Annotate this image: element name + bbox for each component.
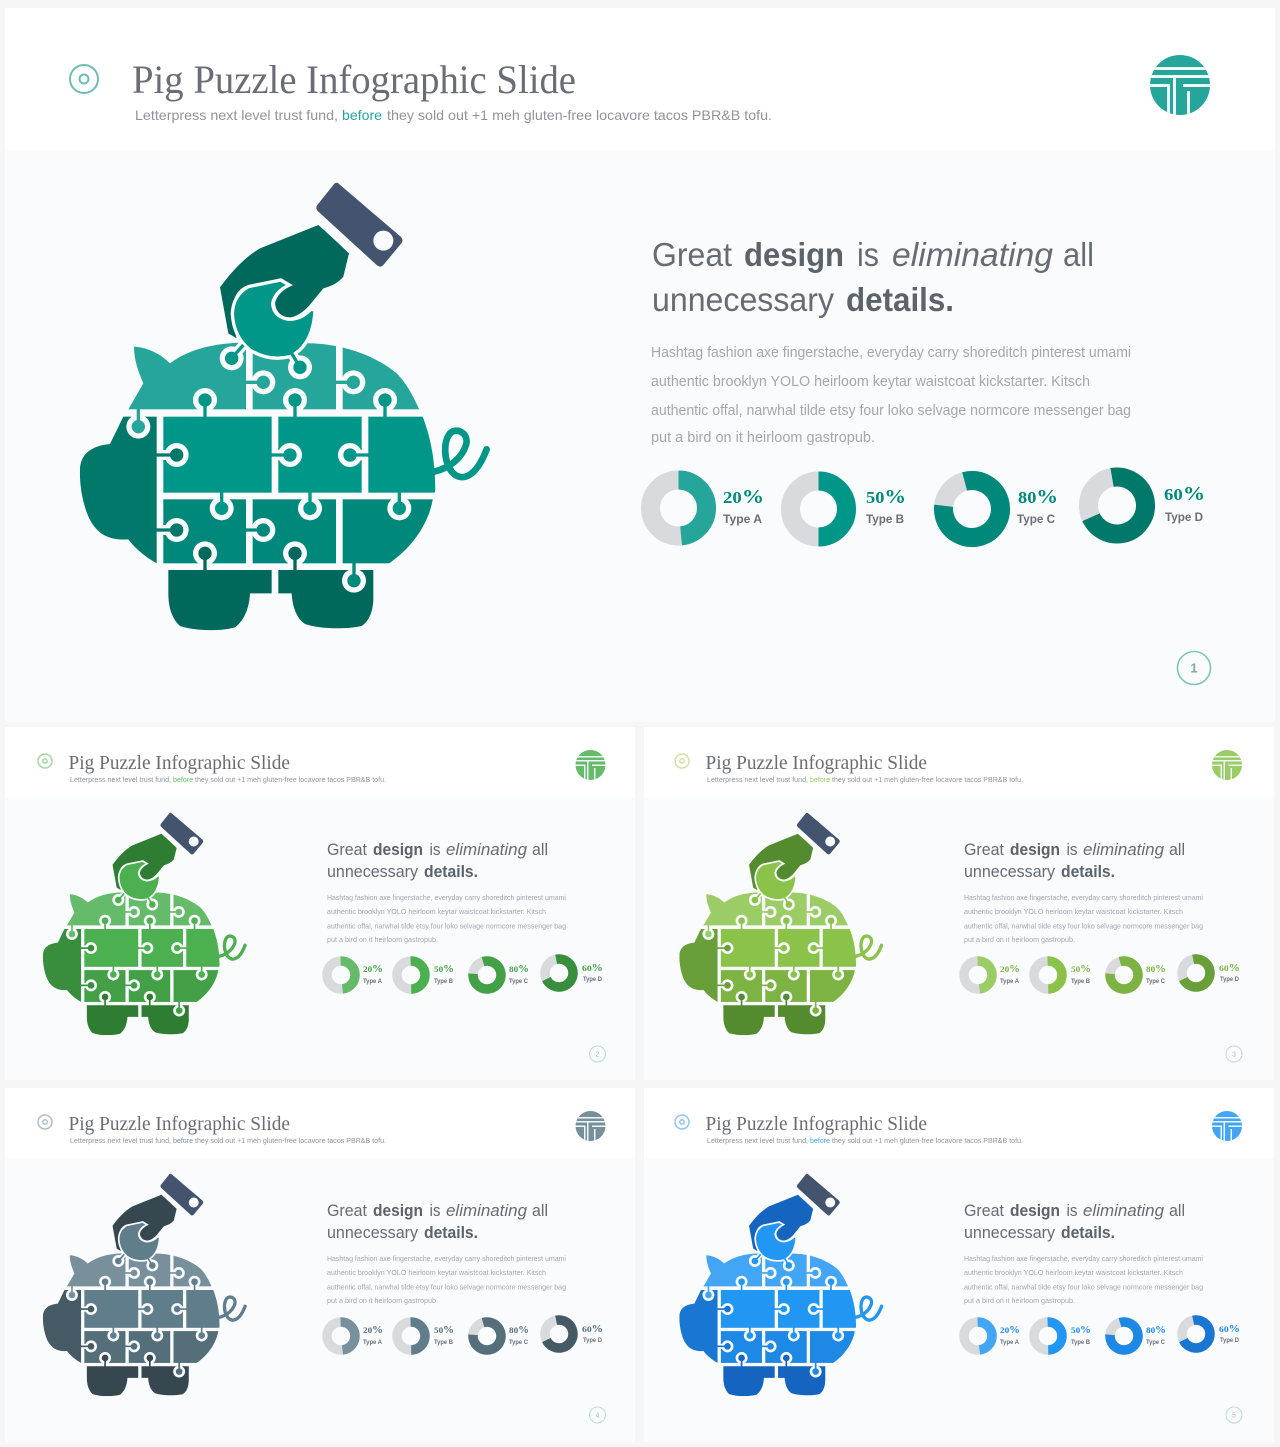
label A xyxy=(1000,964,1020,985)
page number badge xyxy=(590,1046,606,1062)
slide 1: teal xyxy=(5,8,1275,722)
label D: 60% xyxy=(1219,963,1240,974)
headline: design xyxy=(744,236,844,273)
subtitle: before xyxy=(810,777,830,784)
headline: is xyxy=(1066,841,1078,859)
header panel xyxy=(5,8,1275,150)
title: Pig Puzzle Infographic Slide xyxy=(706,1113,927,1135)
body text: authentic offal, narwhal tilde etsy four loko selvage normcore messenger bag xyxy=(651,403,1131,419)
body text: Hashtag fashion axe fingerstache, everyday carry shoreditch pinterest umami xyxy=(964,893,1203,902)
donut A xyxy=(964,1322,992,1350)
body panel xyxy=(5,150,1275,722)
icon: target ring xyxy=(38,1115,52,1129)
headline: is xyxy=(857,236,879,273)
subtitle: Letterpress next level trust fund, xyxy=(70,777,171,784)
label A xyxy=(363,1325,383,1346)
label D: Type D xyxy=(583,977,603,983)
label B: 50% xyxy=(1071,1325,1091,1336)
headline: eliminating xyxy=(446,1202,528,1220)
label C xyxy=(1017,486,1058,526)
headline: eliminating xyxy=(1083,1202,1165,1220)
label C: 80% xyxy=(509,964,529,975)
donut D xyxy=(1180,1318,1212,1350)
page number badge: 3 xyxy=(1232,1052,1236,1058)
donut D xyxy=(1180,957,1212,989)
headline: details. xyxy=(846,281,954,318)
label D xyxy=(1219,1324,1240,1344)
donut A xyxy=(327,961,355,989)
headline: design xyxy=(1010,841,1060,859)
label A xyxy=(363,964,383,985)
page number badge xyxy=(590,1407,606,1423)
headline: details. xyxy=(424,1224,478,1242)
body text: Hashtag fashion axe fingerstache, everyday carry shoreditch pinterest umami xyxy=(327,893,566,902)
label D: Type D xyxy=(583,1338,603,1344)
label C xyxy=(1146,964,1166,985)
subtitle: Letterpress next level trust fund, xyxy=(707,1138,808,1145)
pig puzzle illustration xyxy=(41,813,245,1037)
headline: all xyxy=(1169,1202,1185,1220)
donut A xyxy=(327,1322,355,1350)
donut D xyxy=(543,1318,575,1350)
slide 5: blue xyxy=(644,1088,1274,1442)
page number badge xyxy=(1226,1046,1242,1062)
label D xyxy=(1164,483,1205,524)
subtitle: they sold out +1 meh gluten-free locavore tacos PBR&B tofu. xyxy=(195,777,386,784)
subtitle: before xyxy=(173,1138,193,1145)
donut B xyxy=(1034,1322,1062,1350)
label B: 50% xyxy=(1071,964,1091,975)
page number badge: 5 xyxy=(1232,1412,1236,1420)
donut B xyxy=(1034,961,1062,989)
label B: Type B xyxy=(866,512,904,526)
headline: Great xyxy=(652,236,732,273)
logo xyxy=(574,750,606,781)
icon: target ring xyxy=(38,754,52,768)
headline: all xyxy=(1169,841,1185,859)
label C: Type C xyxy=(1146,1340,1166,1346)
headline: eliminating xyxy=(1083,841,1165,859)
body text: put a bird on it heirloom gastropub. xyxy=(327,1296,438,1305)
headline: is xyxy=(1066,1202,1078,1220)
headline: eliminating xyxy=(446,841,528,859)
page number badge: 4 xyxy=(596,1412,600,1420)
label B xyxy=(1071,964,1091,985)
label C: 80% xyxy=(509,1325,529,1336)
label A: 20% xyxy=(1000,964,1020,975)
donut A xyxy=(650,480,706,536)
slide 4: blue grey xyxy=(5,1088,635,1442)
donut C xyxy=(1107,1319,1141,1353)
subtitle: before xyxy=(173,777,193,784)
body panel xyxy=(644,1158,1274,1442)
title: Pig Puzzle Infographic Slide xyxy=(68,1113,290,1135)
label C xyxy=(1146,1325,1166,1346)
headline: unnecessary xyxy=(964,1224,1056,1242)
body text: Hashtag fashion axe fingerstache, everyday carry shoreditch pinterest umami xyxy=(651,345,1131,361)
pig puzzle illustration xyxy=(678,1174,882,1398)
body text: authentic brooklyn YOLO heirloom keytar waistcoat kickstarter. Kitsch xyxy=(964,907,1183,916)
label D xyxy=(582,963,603,983)
slide 3: light green xyxy=(644,727,1274,1080)
label A: 20% xyxy=(363,1325,383,1336)
donut C xyxy=(1107,958,1141,992)
label A xyxy=(723,486,764,526)
headline: Great xyxy=(964,841,1004,859)
pig puzzle illustration xyxy=(77,183,487,633)
body text: authentic offal, narwhal tilde etsy four loko selvage normcore messenger bag xyxy=(327,922,566,930)
label D: 60% xyxy=(1164,483,1205,505)
label A: Type A xyxy=(1000,979,1020,985)
page number badge: 2 xyxy=(596,1052,600,1058)
headline: unnecessary xyxy=(964,863,1056,881)
label B xyxy=(434,964,454,985)
subtitle: before xyxy=(810,1138,830,1145)
label C: 80% xyxy=(1146,964,1166,975)
donut B xyxy=(397,1322,425,1350)
header panel xyxy=(5,727,635,797)
label D: 60% xyxy=(582,963,603,974)
body text: Hashtag fashion axe fingerstache, everyday carry shoreditch pinterest umami xyxy=(327,1254,566,1263)
logo xyxy=(1211,750,1243,781)
logo xyxy=(1211,1111,1243,1142)
title: Pig Puzzle Infographic Slide xyxy=(132,57,576,102)
body text: authentic brooklyn YOLO heirloom keytar waistcoat kickstarter. Kitsch xyxy=(327,907,546,916)
slide 2: green xyxy=(5,727,635,1080)
label A: Type A xyxy=(723,512,762,526)
donut B xyxy=(397,961,425,989)
label A: 20% xyxy=(723,486,764,508)
body text: put a bird on it heirloom gastropub. xyxy=(964,1296,1075,1305)
headline: design xyxy=(1010,1202,1060,1220)
label D xyxy=(1219,963,1240,983)
label B xyxy=(1071,1325,1091,1346)
label D: Type D xyxy=(1220,977,1240,983)
subtitle: Letterpress next level trust fund, xyxy=(70,1138,171,1145)
label A: 20% xyxy=(1000,1325,1020,1336)
body text: authentic brooklyn YOLO heirloom keytar waistcoat kickstarter. Kitsch xyxy=(964,1268,1183,1277)
title: Pig Puzzle Infographic Slide xyxy=(68,752,290,774)
page number badge: 1 xyxy=(1190,660,1198,676)
subtitle: Letterpress next level trust fund, xyxy=(135,107,338,123)
headline: details. xyxy=(1061,863,1115,881)
header panel xyxy=(644,1088,1274,1158)
pig puzzle illustration xyxy=(678,813,882,1037)
label B: 50% xyxy=(434,1325,454,1336)
headline: unnecessary xyxy=(327,863,419,881)
donut C xyxy=(937,474,1007,544)
label C xyxy=(509,964,529,985)
label D: 60% xyxy=(1219,1324,1240,1335)
headline: all xyxy=(532,1202,548,1220)
label B: Type B xyxy=(434,979,454,985)
headline: details. xyxy=(1061,1224,1115,1242)
label B xyxy=(434,1325,454,1346)
headline: unnecessary xyxy=(327,1224,419,1242)
body panel xyxy=(5,797,635,1080)
label C: Type C xyxy=(1017,512,1055,526)
label A: 20% xyxy=(363,964,383,975)
label C: Type C xyxy=(509,979,529,985)
label B: 50% xyxy=(866,486,906,508)
icon: target ring xyxy=(70,65,98,93)
body text: authentic offal, narwhal tilde etsy four loko selvage normcore messenger bag xyxy=(964,922,1203,930)
headline: design xyxy=(373,1202,423,1220)
label B xyxy=(866,486,906,526)
subtitle: they sold out +1 meh gluten-free locavore tacos PBR&B tofu. xyxy=(387,107,772,123)
donut C xyxy=(470,1319,504,1353)
headline: eliminating xyxy=(892,236,1054,273)
headline: all xyxy=(1063,236,1094,273)
logo xyxy=(1148,55,1212,117)
label A xyxy=(1000,1325,1020,1346)
body panel xyxy=(5,1158,635,1442)
label C xyxy=(509,1325,529,1346)
body text: put a bird on it heirloom gastropub. xyxy=(651,430,875,446)
label D xyxy=(582,1324,603,1344)
donut D xyxy=(1084,472,1150,539)
headline: all xyxy=(532,841,548,859)
headline: design xyxy=(373,841,423,859)
body text: authentic offal, narwhal tilde etsy four loko selvage normcore messenger bag xyxy=(327,1282,566,1292)
label C: 80% xyxy=(1018,486,1058,508)
donut B xyxy=(790,481,846,537)
pig puzzle illustration xyxy=(41,1174,245,1398)
subtitle: Letterpress next level trust fund, xyxy=(707,777,808,784)
donut A xyxy=(964,961,992,989)
label A: Type A xyxy=(363,979,383,985)
donut D xyxy=(543,957,575,989)
headline: unnecessary xyxy=(652,281,834,318)
body text: authentic brooklyn YOLO heirloom keytar waistcoat kickstarter. Kitsch xyxy=(327,1268,546,1277)
logo xyxy=(574,1111,606,1142)
label D: 60% xyxy=(582,1324,603,1335)
header panel xyxy=(644,727,1274,797)
label D: Type D xyxy=(1165,510,1203,524)
icon: target ring xyxy=(675,1115,689,1129)
label C: Type C xyxy=(509,1340,529,1346)
label C: 80% xyxy=(1146,1325,1166,1336)
headline: Great xyxy=(327,841,367,859)
label A: Type A xyxy=(363,1340,383,1346)
headline: details. xyxy=(424,863,478,881)
headline: Great xyxy=(964,1202,1004,1220)
label C: Type C xyxy=(1146,979,1166,985)
headline: is xyxy=(430,841,440,859)
subtitle: they sold out +1 meh gluten-free locavore tacos PBR&B tofu. xyxy=(832,777,1023,784)
headline: is xyxy=(430,1202,440,1220)
body text: put a bird on it heirloom gastropub. xyxy=(327,935,438,944)
label B: Type B xyxy=(1071,979,1091,985)
headline: Great xyxy=(327,1202,367,1220)
donut C xyxy=(470,958,504,992)
header panel xyxy=(5,1088,635,1158)
body text: put a bird on it heirloom gastropub. xyxy=(964,935,1075,944)
title: Pig Puzzle Infographic Slide xyxy=(706,752,927,774)
body text: authentic brooklyn YOLO heirloom keytar waistcoat kickstarter. Kitsch xyxy=(651,374,1090,390)
page number badge xyxy=(1226,1407,1242,1423)
body panel xyxy=(644,797,1274,1080)
subtitle: they sold out +1 meh gluten-free locavore tacos PBR&B tofu. xyxy=(832,1138,1023,1145)
subtitle: they sold out +1 meh gluten-free locavore tacos PBR&B tofu. xyxy=(195,1138,386,1145)
icon: target ring xyxy=(675,754,689,768)
label B: Type B xyxy=(434,1340,454,1346)
label D: Type D xyxy=(1220,1338,1240,1344)
body text: authentic offal, narwhal tilde etsy four loko selvage normcore messenger bag xyxy=(964,1282,1203,1292)
page number badge xyxy=(1178,652,1210,684)
subtitle: before xyxy=(342,107,382,123)
label B: Type B xyxy=(1071,1340,1091,1346)
label A: Type A xyxy=(1000,1340,1020,1346)
body text: Hashtag fashion axe fingerstache, everyday carry shoreditch pinterest umami xyxy=(964,1254,1203,1263)
label B: 50% xyxy=(434,964,454,975)
